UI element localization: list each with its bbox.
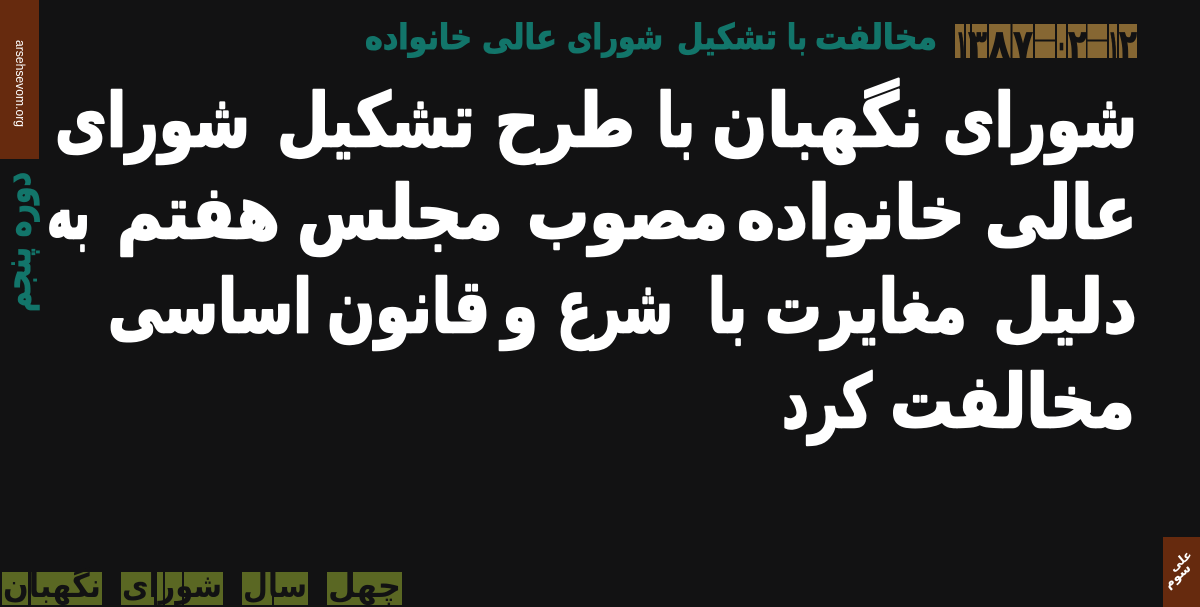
series title text: نگهبان bbox=[3, 566, 101, 606]
headline line 1: شورای bbox=[55, 78, 250, 165]
headline line 4 bbox=[782, 359, 1135, 445]
headline line 1: شورای bbox=[943, 78, 1137, 165]
main headline bbox=[47, 78, 1137, 445]
headline line 3: اساسی bbox=[108, 264, 312, 350]
panel: logo tab bbox=[1161, 537, 1200, 607]
headline line 2: عالی bbox=[985, 170, 1137, 256]
series title text bbox=[3, 566, 401, 606]
date digits: ۰ bbox=[1056, 22, 1067, 68]
panel: site label tab bbox=[0, 0, 39, 159]
date digits: ۳ bbox=[968, 22, 987, 68]
headline line 4: کرد bbox=[782, 359, 873, 445]
date badge bbox=[955, 22, 1137, 68]
subtitle: تشکیل bbox=[677, 18, 777, 58]
date digits: ۱ bbox=[956, 22, 967, 68]
date digits: ۸ bbox=[989, 22, 1010, 68]
subtitle bbox=[365, 18, 937, 58]
site address: arsehsevom.org bbox=[13, 40, 27, 127]
logo calligraphy: علی bbox=[1166, 547, 1195, 574]
headline line 1: با bbox=[657, 78, 695, 164]
headline line 1: تشکیل bbox=[277, 78, 475, 164]
subtitle: با bbox=[787, 18, 807, 58]
headline line 3: و bbox=[499, 264, 538, 351]
headline line 3: دلیل bbox=[993, 264, 1137, 350]
headline line 2: هفتم bbox=[117, 170, 280, 256]
subtitle: خانواده bbox=[365, 18, 472, 58]
headline line 2 bbox=[47, 170, 1137, 257]
headline line 2: مجلس bbox=[297, 170, 503, 256]
headline line 1: طرح bbox=[495, 78, 635, 164]
subtitle: عالی bbox=[482, 18, 557, 58]
logo calligraphy bbox=[1161, 547, 1195, 592]
series title text: شورای bbox=[122, 566, 222, 606]
headline line 4: مخالفت bbox=[890, 359, 1135, 445]
date digits: ۱ bbox=[1108, 22, 1119, 68]
logo calligraphy: سوم bbox=[1161, 561, 1194, 592]
headline line 1 bbox=[55, 78, 1137, 165]
series title text: چهل bbox=[328, 566, 401, 606]
series title text: سال bbox=[243, 566, 307, 605]
date digits: ۲ bbox=[1068, 22, 1087, 68]
headline line 3: با bbox=[708, 264, 747, 350]
date digits: ۲ bbox=[1119, 22, 1137, 68]
headline line 2: مصوب bbox=[527, 170, 728, 257]
headline line 1: نگهبان bbox=[712, 78, 923, 165]
headline line 3: مغایرت bbox=[765, 264, 967, 350]
headline line 2: خانواده bbox=[737, 170, 965, 257]
headline line 2: به bbox=[47, 170, 90, 256]
date digits bbox=[956, 22, 1137, 68]
date digits: ۷ bbox=[1013, 22, 1033, 68]
subtitle: مخالفت bbox=[815, 18, 937, 58]
series title band bbox=[2, 566, 402, 606]
headline line 3: قانون bbox=[327, 264, 490, 351]
subtitle: شورای bbox=[567, 18, 663, 58]
headline line 3 bbox=[108, 264, 1137, 351]
headline line 3: شرع bbox=[557, 264, 673, 350]
